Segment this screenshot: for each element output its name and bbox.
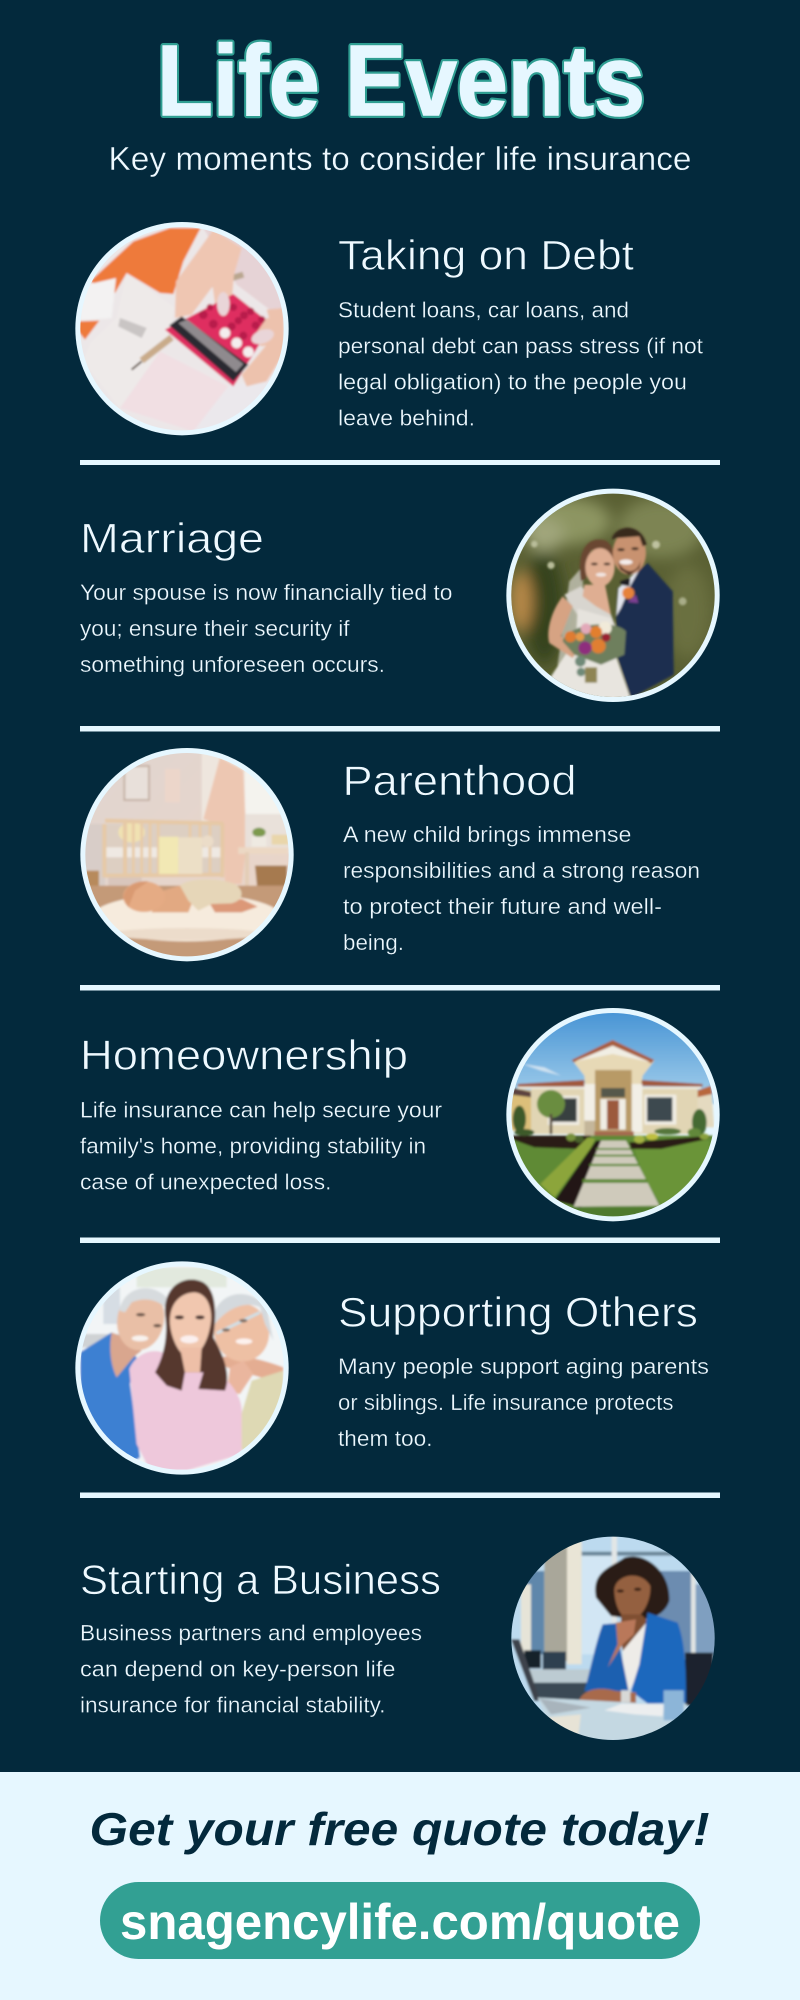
photo: house with lawn xyxy=(501,1004,725,1229)
panel: taking on debt xyxy=(70,218,703,442)
heading: Parenthood xyxy=(342,757,576,804)
panel: parenthood xyxy=(75,744,700,969)
call to action heading: Get your free quote today! xyxy=(90,1803,710,1855)
photo: calculator and receipts xyxy=(70,218,294,442)
body text xyxy=(343,822,700,955)
body text xyxy=(80,1098,442,1194)
panel: homeownership xyxy=(80,1004,725,1229)
subtitle: Key moments to consider life insurance xyxy=(108,140,692,177)
body text: case of unexpected loss. xyxy=(80,1170,332,1194)
body text: can depend on key-person life xyxy=(80,1656,396,1682)
body text xyxy=(338,1354,709,1451)
body text xyxy=(80,580,453,677)
photo: three family members xyxy=(70,1257,294,1481)
body text: to protect their future and well- xyxy=(343,894,662,919)
body text xyxy=(338,298,703,430)
heading: Supporting Others xyxy=(338,1288,698,1336)
body text: responsibilities and a strong reason xyxy=(343,858,700,883)
panel: starting a business xyxy=(81,1536,715,1740)
photo: businesswoman at desk xyxy=(511,1536,715,1740)
body text: or siblings. Life insurance protects xyxy=(338,1390,674,1415)
body text: insurance for financial stability. xyxy=(80,1692,386,1718)
body text: something unforeseen occurs. xyxy=(80,652,385,677)
panel: marriage xyxy=(80,485,725,709)
photo: wedding couple xyxy=(501,485,725,709)
url button xyxy=(100,1882,700,1959)
heading: Homeownership xyxy=(80,1032,408,1078)
body text: family's home, providing stability in xyxy=(80,1134,426,1158)
body text: A new child brings immense xyxy=(343,822,632,847)
body text: legal obligation) to the people you xyxy=(338,370,687,394)
body text: you; ensure their security if xyxy=(80,616,350,641)
body text: Life insurance can help secure your xyxy=(80,1098,442,1122)
body text: personal debt can pass stress (if not xyxy=(338,334,703,358)
body text: Business partners and employees xyxy=(80,1620,422,1646)
heading: Starting a Business xyxy=(80,1556,441,1603)
heading: Taking on Debt xyxy=(338,232,634,278)
body text: Many people support aging parents xyxy=(338,1354,709,1379)
body text: Student loans, car loans, and xyxy=(338,298,629,322)
body text: Your spouse is now financially tied to xyxy=(80,580,453,605)
photo: sleeping baby in nursery xyxy=(75,744,299,969)
panel: supporting others xyxy=(70,1257,709,1481)
body text: leave behind. xyxy=(338,406,475,430)
title: Life Events xyxy=(157,25,645,137)
url button: snagencylife.com/quote xyxy=(120,1894,680,1950)
title: Life Events xyxy=(157,25,645,137)
body text: them too. xyxy=(338,1426,432,1451)
heading: Marriage xyxy=(80,514,264,562)
body text: being. xyxy=(343,930,404,955)
footer panel xyxy=(0,1772,800,2000)
body text xyxy=(80,1620,422,1718)
